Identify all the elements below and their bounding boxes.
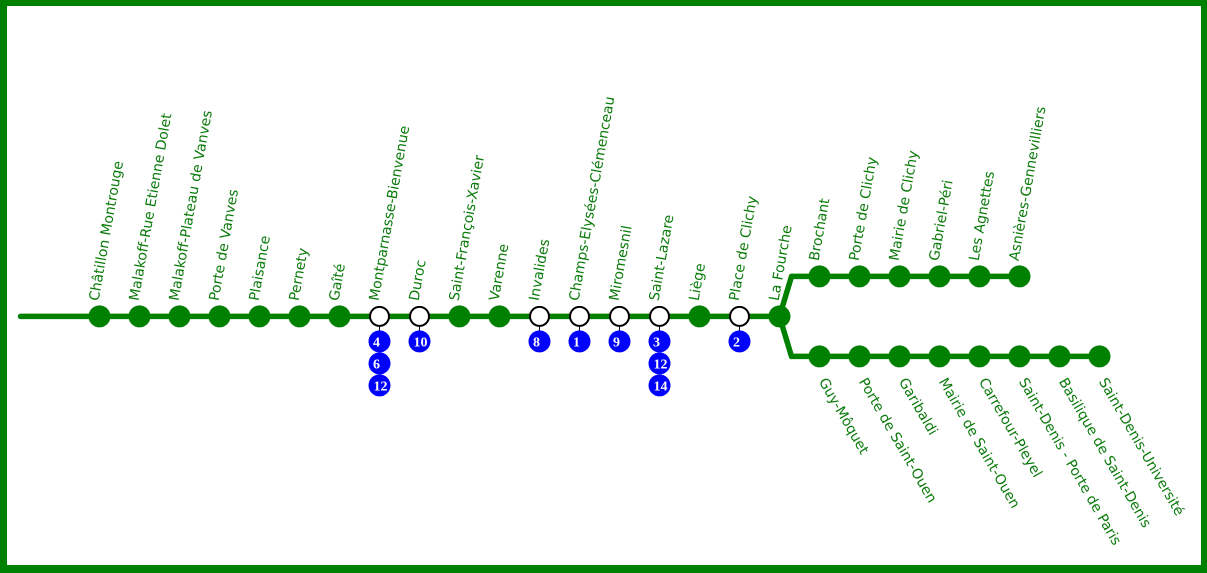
station labels: lower branch: Saint-Denis - Porte de Paris <box>1015 375 1124 548</box>
station labels: main line and upper branch: La Fourche <box>767 224 796 302</box>
connecting line badges: 2 <box>733 335 740 350</box>
connecting line badges: 12 <box>654 357 668 372</box>
station labels: main line and upper branch: Pernety <box>287 247 312 302</box>
station labels: lower branch: Carrefour-Pleyel <box>975 375 1045 480</box>
line track <box>20 276 1100 356</box>
station labels: main line and upper branch: Brochant <box>807 197 833 262</box>
station labels: main line and upper branch: Invalides <box>527 238 553 302</box>
station labels: main line and upper branch: Plaisance <box>247 234 274 302</box>
station labels: lower branch: Garibaldi <box>895 375 941 438</box>
station labels: main line and upper branch: Asnières-Gennevilliers <box>1007 105 1050 262</box>
station labels: main line and upper branch: Miromesnil <box>607 224 636 302</box>
station labels: main line and upper branch: Duroc <box>407 259 430 302</box>
connecting line badges: 9 <box>613 335 620 350</box>
interchange stations <box>370 307 749 326</box>
connecting line badges: 8 <box>533 335 540 350</box>
station labels: main line and upper branch: Liège <box>687 262 709 302</box>
interchange connectors <box>380 326 740 336</box>
station labels: lower branch: Mairie de Saint-Ouen <box>935 375 1023 511</box>
station labels: main line and upper branch: Gabriel-Péri <box>927 179 957 262</box>
connecting line badges: 3 <box>653 335 660 350</box>
connecting line badges: 10 <box>414 335 428 350</box>
station labels: main line and upper branch: Mairie de Clichy <box>887 149 922 262</box>
station labels: main line and upper branch: Malakoff-Plateau de Vanves <box>167 109 216 302</box>
station labels: lower branch: Saint-Denis-Université <box>1095 375 1187 519</box>
station labels: main line and upper branch: Porte de Clichy <box>847 156 881 262</box>
station labels: main line and upper branch: Porte de Vanves <box>207 188 242 302</box>
station labels: main line and upper branch: Gaîté <box>327 262 349 302</box>
connecting line badges: 6 <box>373 357 380 372</box>
station labels: lower branch: Porte de Saint-Ouen <box>855 375 940 506</box>
station labels: main line and upper branch: Montparnasse-Bienvenue <box>367 125 413 302</box>
station labels: main line and upper branch: Les Agnettes <box>967 170 998 262</box>
station labels: main line and upper branch <box>87 95 1050 302</box>
connecting line badges: 1 <box>573 335 580 350</box>
connecting line badges: 12 <box>374 379 388 394</box>
station labels: lower branch <box>815 375 1187 548</box>
station labels: main line and upper branch: Châtillon Montrouge <box>87 160 127 302</box>
station labels: main line and upper branch: Place de Clichy <box>727 195 761 302</box>
connecting line badges <box>368 330 750 396</box>
metro line diagram <box>20 95 1187 548</box>
connecting line badges: 14 <box>654 379 668 394</box>
connecting line badges: 4 <box>373 335 380 350</box>
station labels: lower branch: Guy-Môquet <box>815 375 872 458</box>
station labels: main line and upper branch: Champs-Elysées-Clémenceau <box>567 95 618 302</box>
station labels: lower branch: Basilique de Saint-Denis <box>1055 375 1154 531</box>
station labels: main line and upper branch: Saint-Lazare <box>647 213 678 302</box>
station labels: main line and upper branch: Saint-François-Xavier <box>447 154 488 302</box>
station labels: main line and upper branch: Malakoff-Rue Etienne Dolet <box>127 112 176 302</box>
plain stations <box>88 265 1110 367</box>
station labels: main line and upper branch: Varenne <box>487 243 512 302</box>
